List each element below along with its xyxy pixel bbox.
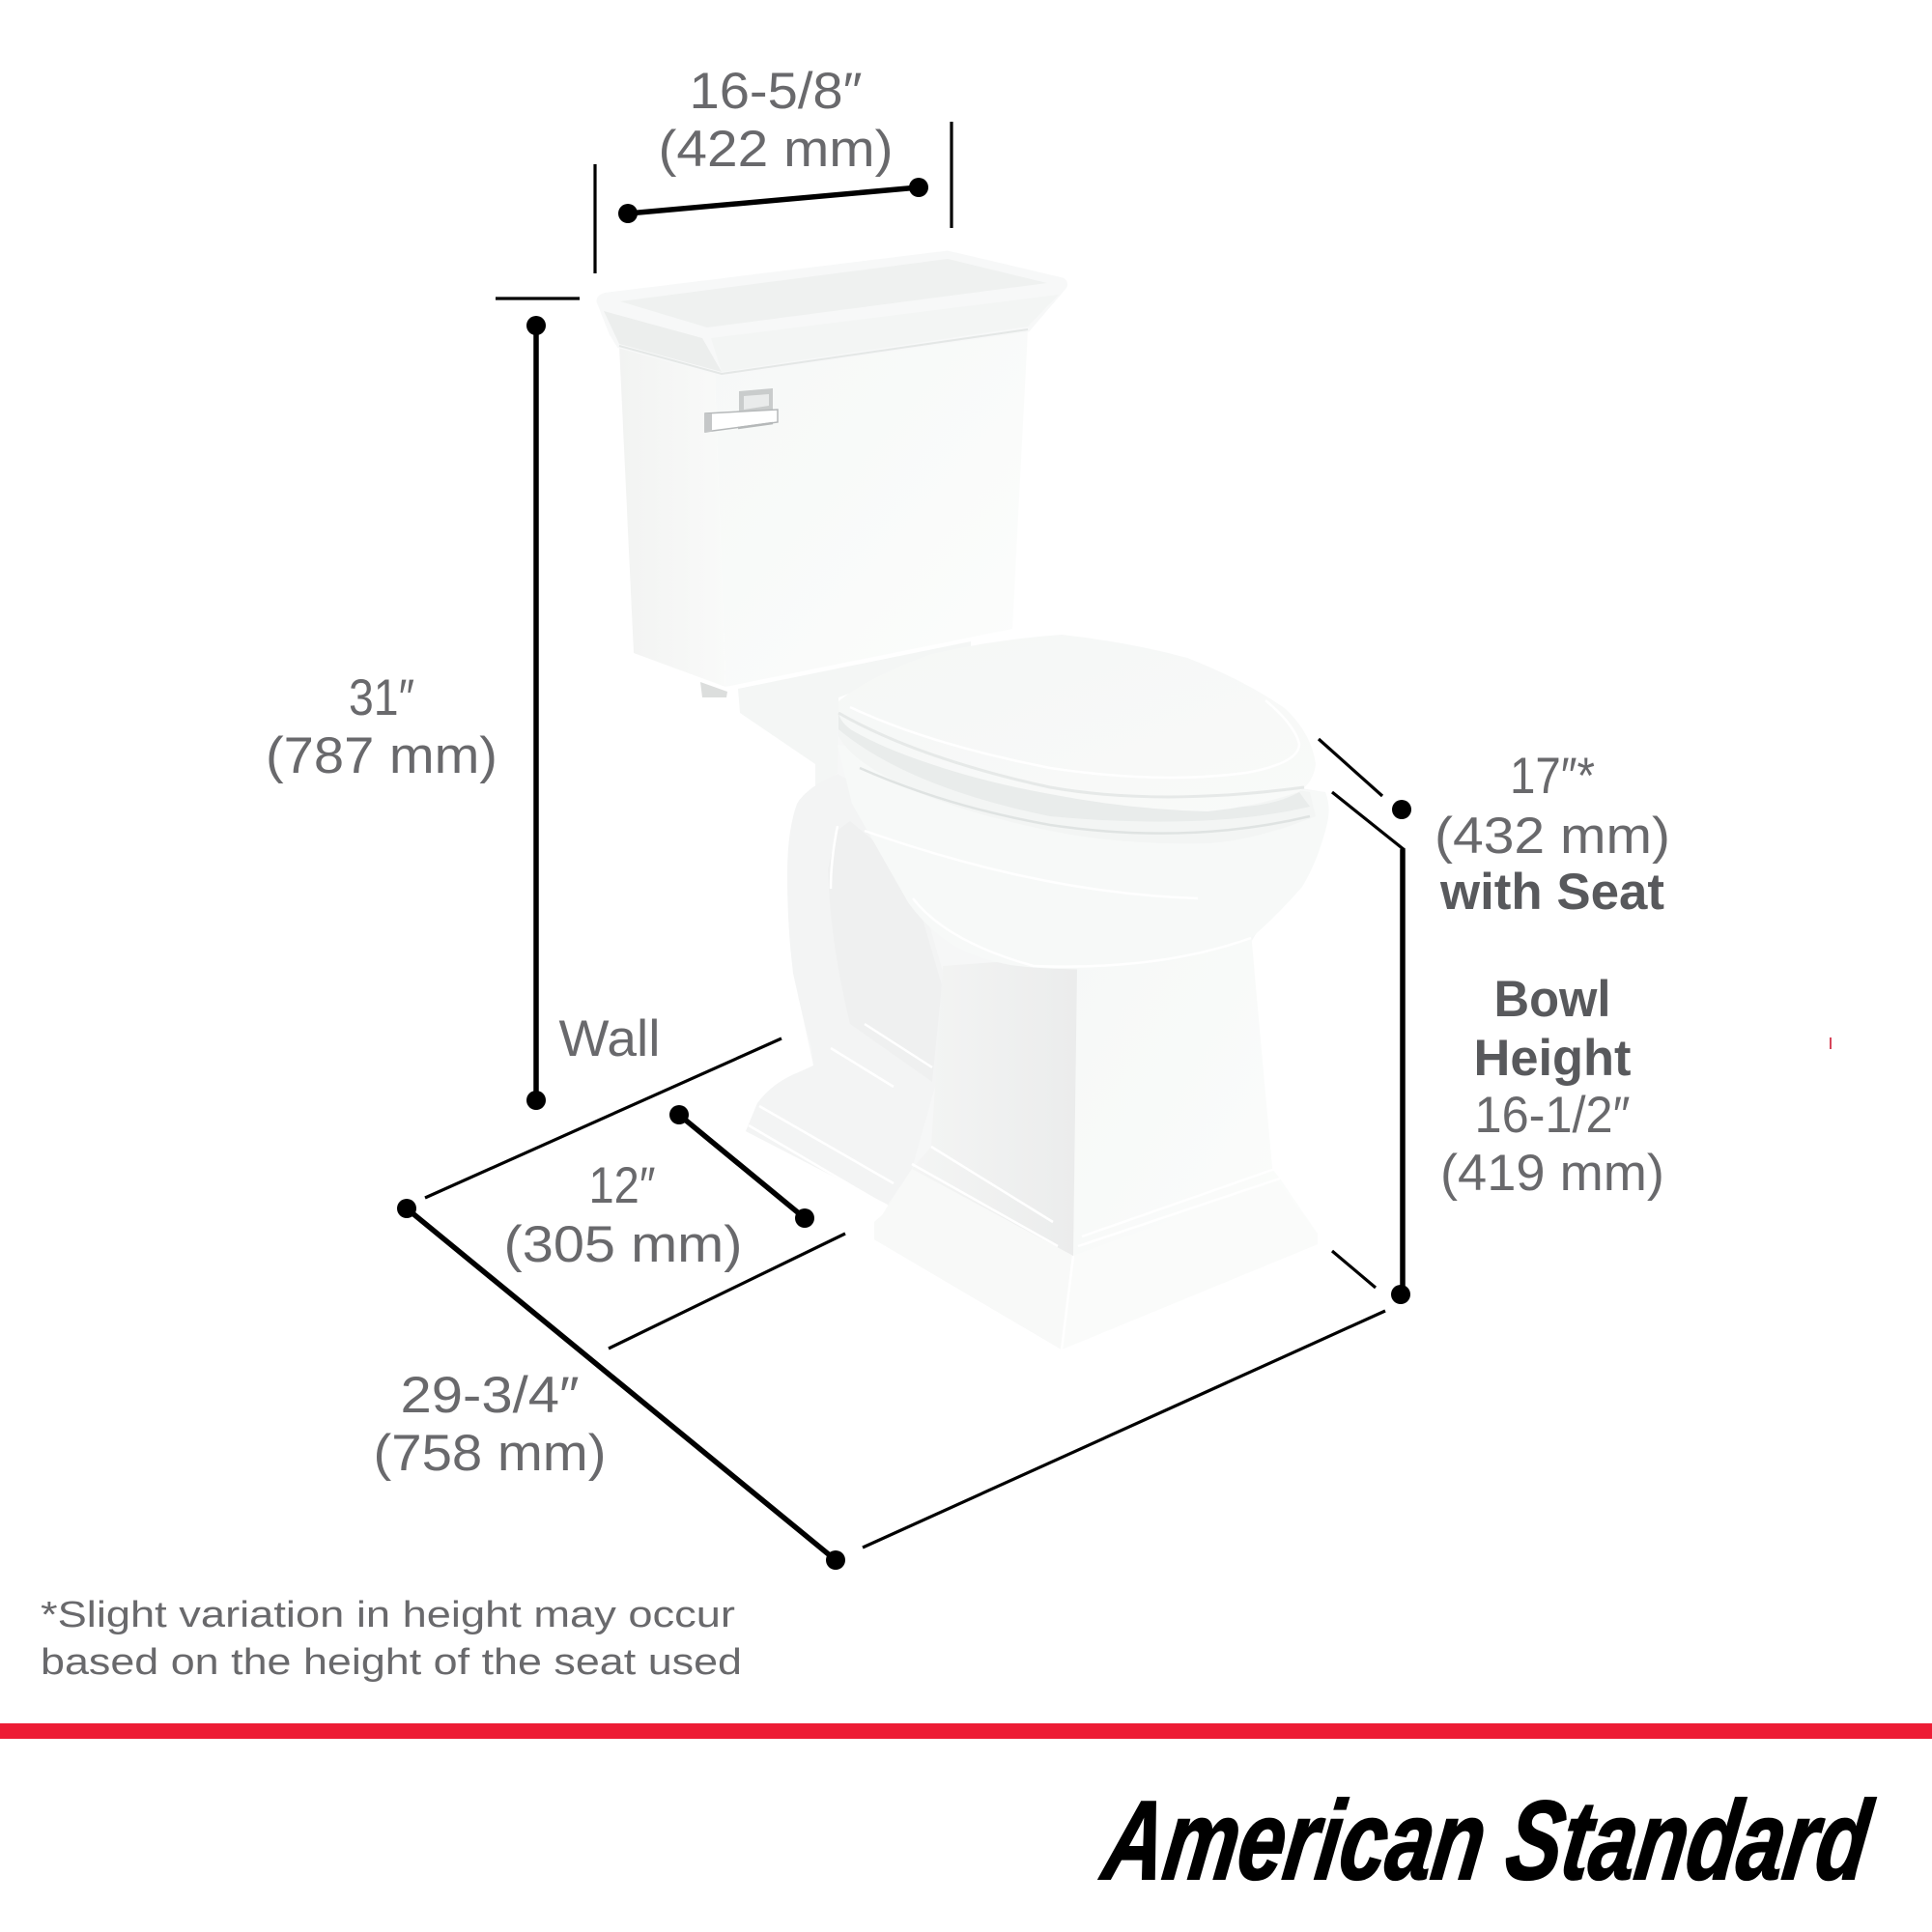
neck [738,641,971,787]
label: seat height [1435,748,1670,921]
label: depth: 29-3/4″ [400,1367,580,1424]
label: bowl height: Height [1474,1030,1631,1087]
label: tank width: 16-5/8″ [690,63,862,120]
rough-in dimension [425,1038,845,1349]
pedestal base [874,932,1318,1350]
red divider bar [0,1723,1932,1739]
label: wall: Wall [558,1010,661,1067]
width dimension: tank [595,63,952,273]
drain stub [700,682,727,697]
footnote [41,1595,742,1683]
label: bowl height: (419 mm) [1440,1145,1664,1202]
toilet tank [599,253,1065,697]
label: overall height [266,669,497,784]
label: seat height: 17″* [1510,748,1595,805]
red speck [1830,1037,1832,1049]
depth dimension [373,1199,1385,1570]
flush lever [705,388,778,432]
footnote: based on the height of the seat used [41,1642,742,1683]
label: bowl height: Bowl [1493,971,1611,1028]
height dimension: overall [266,298,580,1110]
label: rough-in [504,1157,742,1273]
label: overall height: 31″ [349,669,414,726]
label: bowl height [1440,971,1664,1202]
label: depth: (758 mm) [373,1425,607,1482]
label: tank width: (422 mm) [659,121,893,178]
rear trapway [746,774,947,1205]
bowl and base silhouette [746,715,1327,1350]
label: depth [373,1367,607,1482]
toilet seat lid [838,635,1316,811]
label: seat height: with Seat [1439,864,1664,921]
label: bowl height: 16-1/2″ [1474,1087,1631,1144]
label: rough-in: (305 mm) [504,1216,742,1273]
label: rough-in: 12″ [589,1157,655,1214]
bowl height dimension [1319,739,1670,1304]
label: tank width [659,63,893,178]
label: seat height: (432 mm) [1435,808,1670,865]
toilet seat [838,710,1316,843]
toilet illustration [599,253,1329,1350]
label: overall height: (787 mm) [266,727,497,784]
footnote: *Slight variation in height may occur [41,1595,735,1635]
bowl [838,745,1329,969]
